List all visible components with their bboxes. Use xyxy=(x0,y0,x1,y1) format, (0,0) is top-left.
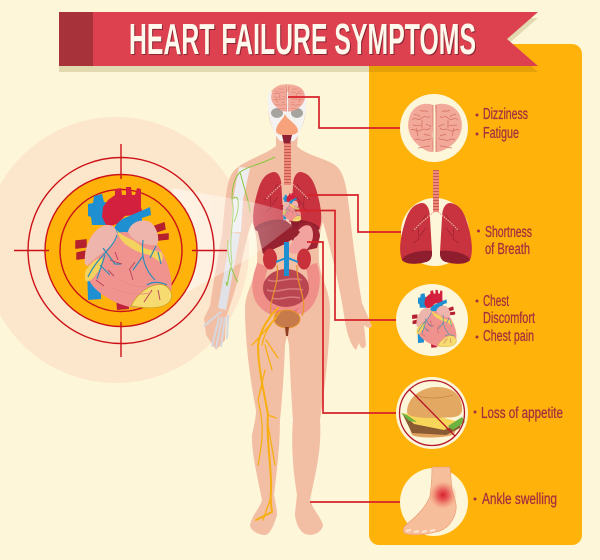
leg nerves xyxy=(252,308,280,520)
text: chest discomfort and pain: Chest pain xyxy=(483,328,534,345)
icon: large heart xyxy=(76,187,172,310)
title banner xyxy=(59,12,538,72)
pale target halo xyxy=(0,117,249,383)
brain in head xyxy=(271,85,305,112)
icon: foot xyxy=(403,467,456,535)
text: shortness of breath xyxy=(477,224,532,258)
trachea xyxy=(284,143,291,185)
symptom: brain xyxy=(400,94,528,162)
text: chest discomfort and pain: Discomfort xyxy=(483,310,535,327)
text: dizziness and fatigue: Dizziness xyxy=(483,106,528,123)
panel: symptoms xyxy=(369,44,582,545)
intestines xyxy=(258,265,314,315)
body lungs xyxy=(253,172,321,233)
swelling glow xyxy=(429,481,457,509)
icon: burger xyxy=(401,387,465,438)
text: chest discomfort and pain: Chest xyxy=(483,293,509,310)
connector lines xyxy=(288,97,403,502)
text: dizziness and fatigue xyxy=(476,106,528,142)
kidneys and vessels xyxy=(263,242,311,316)
symptom: chest xyxy=(396,284,535,356)
human body silhouette xyxy=(204,84,372,535)
skeleton arm with lymph xyxy=(204,157,275,348)
symptom: ankle swelling xyxy=(400,467,557,536)
text: shortness of breath: of Breath xyxy=(485,241,530,258)
text: dizziness and fatigue: Fatigue xyxy=(483,125,519,142)
symptom: loss of appetite xyxy=(396,377,563,449)
liver and stomach xyxy=(257,220,320,254)
lymph lines xyxy=(226,157,275,286)
text: ankle swelling: Ankle swelling xyxy=(482,491,557,508)
symptom: lungs xyxy=(400,170,532,266)
skull xyxy=(268,92,306,144)
small heart on body xyxy=(281,193,301,222)
beam from body heart to target xyxy=(172,188,292,292)
text: shortness of breath: Shortness xyxy=(485,224,532,241)
target reticle xyxy=(14,144,227,357)
text: chest discomfort and pain xyxy=(476,293,535,345)
bladder xyxy=(274,310,300,336)
text: loss of appetite: Loss of appetite xyxy=(481,405,563,422)
